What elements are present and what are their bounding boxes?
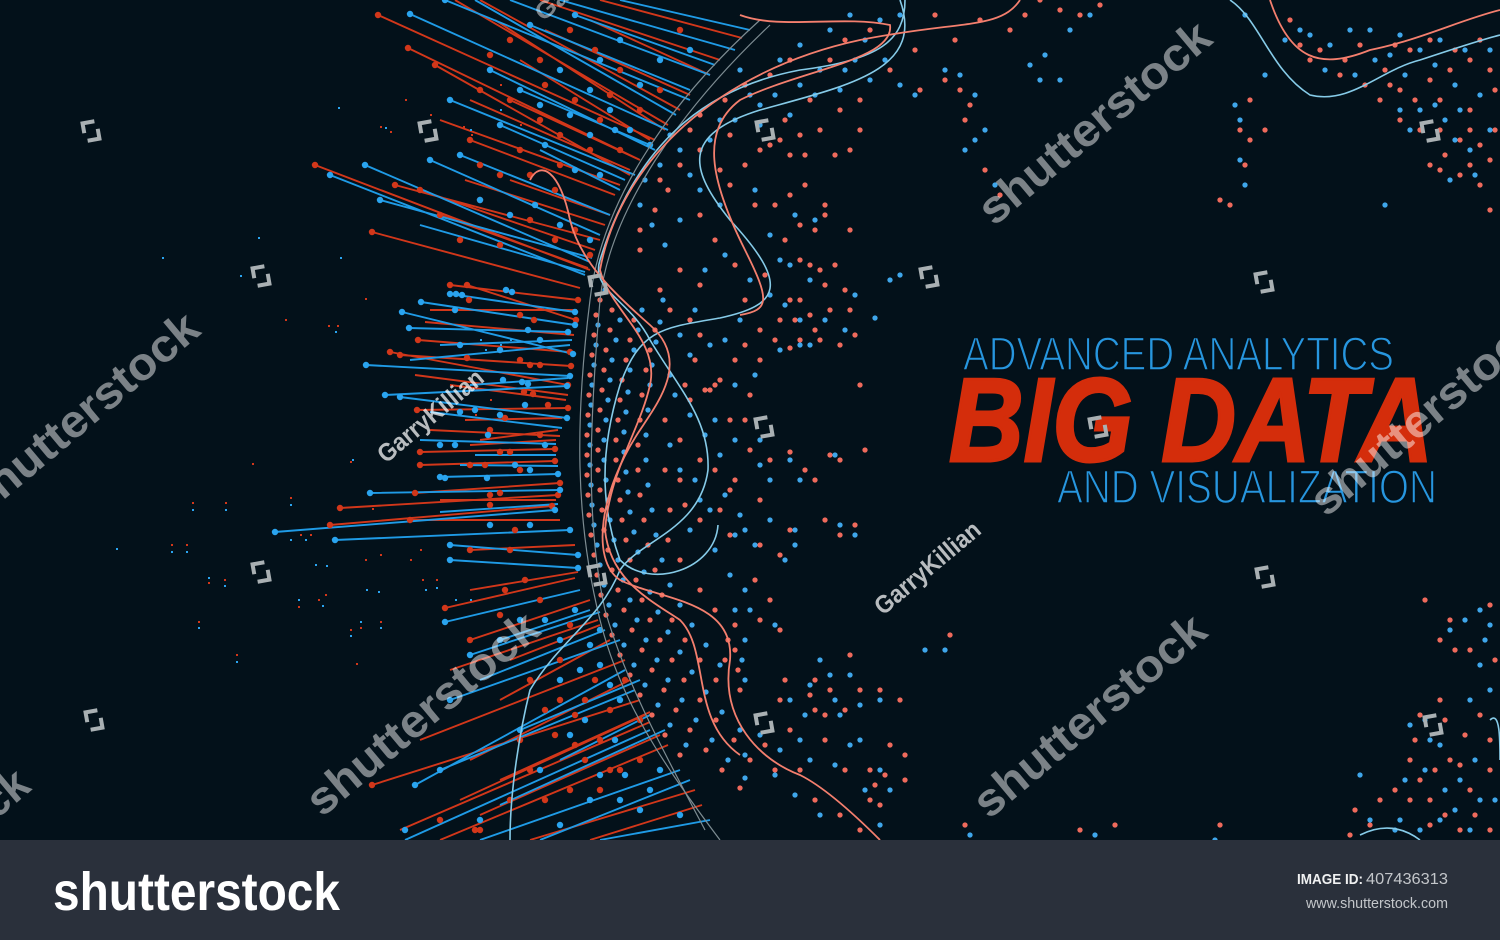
line dots: red <box>315 15 680 830</box>
title: advanced analytics: ADVANCED ANALYTICS <box>963 327 1394 380</box>
image number: 407436313 <box>1366 871 1448 888</box>
contributor watermarks <box>372 364 986 621</box>
curved flow lines: pale blue <box>510 0 1500 840</box>
title: big data: BIG DATA <box>949 354 1433 487</box>
image id: IMAGE ID: <box>1297 871 1363 888</box>
footer logo: shutterstock <box>53 862 341 922</box>
footer bar <box>0 840 1500 940</box>
watermark icons <box>83 120 1441 735</box>
curved flow lines: grey spine <box>580 20 770 840</box>
shutterstock watermarks: shutterstock <box>967 9 1221 235</box>
small scattered points <box>116 85 522 664</box>
curved flow lines: salmon <box>530 0 1500 840</box>
radial lines: red <box>315 0 742 840</box>
shutterstock watermarks: shutterstock <box>962 602 1216 828</box>
line dots: blue <box>275 0 690 830</box>
contributor watermarks: GarryKillian <box>869 516 986 621</box>
shutterstock watermarks: shutterstock <box>295 600 549 826</box>
watermark icon on title <box>1090 417 1106 437</box>
dot field: blue <box>590 15 1495 840</box>
contributor watermarks: GarryKillian <box>372 364 489 469</box>
website: www.shutterstock.com <box>1305 896 1448 912</box>
dot field: salmon <box>587 0 1495 835</box>
radial lines: blue <box>275 0 750 840</box>
